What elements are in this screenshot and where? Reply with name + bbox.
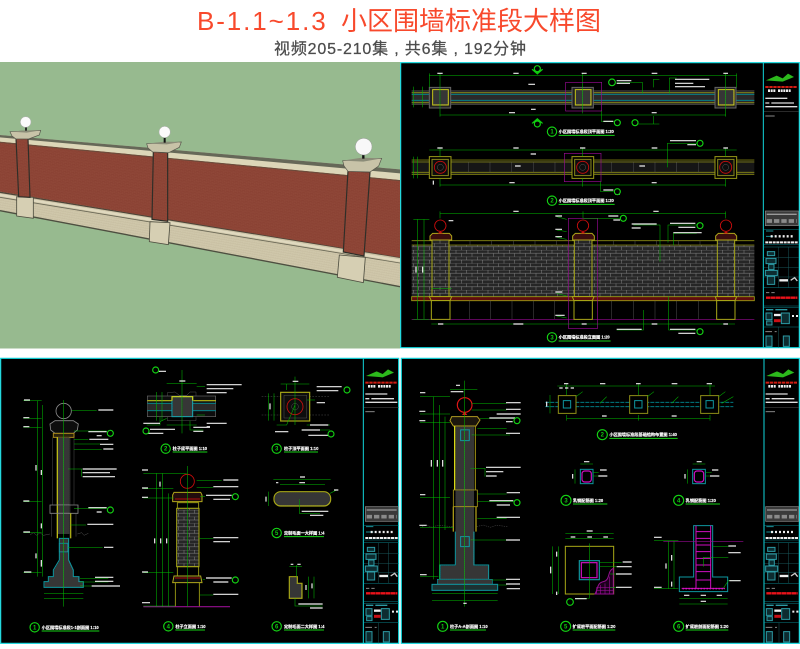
drawing: post section 1	[419, 381, 521, 607]
post 2	[147, 126, 181, 245]
heading: drawing 3: 小区围墙标准段立面图 1:20	[559, 334, 610, 340]
title block sidebar	[364, 369, 399, 643]
title: 小区围墙标准段大样图	[341, 6, 601, 36]
heading: section 5	[272, 528, 325, 538]
heading: section 6	[272, 622, 325, 631]
heading: plan 2	[161, 444, 208, 453]
title block sidebar	[764, 369, 799, 643]
panel: 3D model of brick wall	[0, 62, 400, 348]
title block sidebar	[764, 74, 799, 348]
heading: section 1: 小区围墙标准段1-1剖面图 1:10	[42, 624, 99, 630]
heading: elevation 4	[164, 622, 206, 631]
heading: section 1	[438, 621, 488, 631]
heading: drawing 3: 3	[550, 335, 554, 341]
post 1	[10, 117, 41, 218]
panel: foundation and rebar CAD sheet	[401, 358, 799, 643]
panel: wall plans and elevation CAD sheet	[401, 63, 799, 348]
heading: footing plan 5: 扩底桩平面配筋图 1:20	[573, 623, 616, 629]
heading: section 1	[30, 623, 99, 632]
section marker top	[532, 69, 543, 74]
heading: section 6: 6	[275, 624, 279, 630]
drawing: coping stone section 6	[289, 564, 323, 608]
wall stone base	[0, 192, 400, 287]
title: B-1.1~1.3	[197, 6, 328, 36]
heading: drawing 1: 1	[550, 130, 554, 136]
drawing: coping stone section 5	[266, 477, 338, 515]
drawing: post top plan 2	[143, 367, 242, 434]
heading: plan 2: 2	[164, 447, 168, 453]
wall brick face	[0, 142, 400, 257]
post 3	[337, 138, 382, 283]
heading: foundation 2	[597, 430, 678, 440]
heading: drawing 2: 小区围墙标准段顶平面图 1:20	[559, 197, 615, 203]
subtitle: 视频205-210集 , 共6集 , 192分钟	[274, 40, 526, 58]
heading: drawing 2	[547, 196, 615, 205]
heading: plan 3	[272, 444, 319, 453]
heading: drawing 2: 2	[550, 199, 554, 205]
heading: rebar 3: 乳钢配筋图 1:20	[573, 497, 604, 503]
drawing: post top plan 3	[262, 377, 350, 437]
drawing: wall section 1	[23, 400, 120, 607]
heading: plan 3: 3	[275, 447, 279, 453]
lamp globe	[159, 126, 170, 138]
drawing: rebar column section 3	[573, 462, 607, 484]
heading: rebar 4: 4	[677, 498, 681, 504]
heading: footing section 6	[674, 621, 729, 631]
panel: post section details CAD sheet	[1, 358, 399, 643]
heading: section 5: 定制毛面一大样图 1:4	[284, 530, 325, 536]
wall coping	[0, 135, 400, 181]
drawing: foundation layout 2	[545, 383, 733, 421]
elevation: wall front view	[412, 211, 754, 335]
heading: drawing 1: 小区围墙标准段顶平面图 1:20	[559, 128, 615, 134]
lamp globe	[20, 117, 31, 127]
heading: foundation 2: 小区围墙标准段基础结构布置图 1:40	[609, 431, 678, 437]
heading: plan 2: 柱子底平面图 1:10	[173, 445, 208, 451]
heading: rebar 3	[561, 495, 607, 505]
drawing: footing plan 5	[551, 531, 632, 605]
lamp globe	[355, 138, 372, 155]
heading: plan 3: 柱子顶平面图 1:10	[284, 445, 319, 451]
heading: section 1: 1	[441, 624, 445, 630]
heading: elevation 4: 柱子立面图 1:10	[175, 623, 206, 629]
drawing: footing section 6	[654, 526, 743, 604]
heading: rebar 3: 3	[564, 498, 568, 504]
plan 1: wall top section	[412, 66, 754, 127]
section marker bottom	[532, 119, 543, 123]
drawing: post elevation 4	[142, 466, 238, 607]
heading: footing section 6: 扩底桩剖面配筋图 1:20	[686, 623, 729, 629]
heading: rebar 4	[674, 495, 720, 505]
heading: footing section 6: 6	[677, 624, 681, 630]
heading: drawing 3	[547, 333, 611, 342]
heading: drawing 1	[547, 127, 615, 136]
heading: footing plan 5: 5	[564, 624, 568, 630]
heading: elevation 4: 4	[167, 624, 171, 630]
plan 2: wall top view	[412, 140, 754, 195]
heading: section 1: 1	[33, 625, 37, 631]
drawing: rebar column section 4	[685, 462, 719, 484]
heading: section 5: 5	[275, 531, 279, 537]
heading: foundation 2: 2	[601, 433, 605, 439]
heading: rebar 4: 乳钢配筋图 1:20	[686, 497, 717, 503]
heading: section 1: 柱子A-A剖面图 1:10	[450, 623, 488, 629]
heading: footing plan 5	[561, 621, 616, 631]
heading: section 6: 定制毛面二大样图 1:4	[284, 623, 325, 629]
